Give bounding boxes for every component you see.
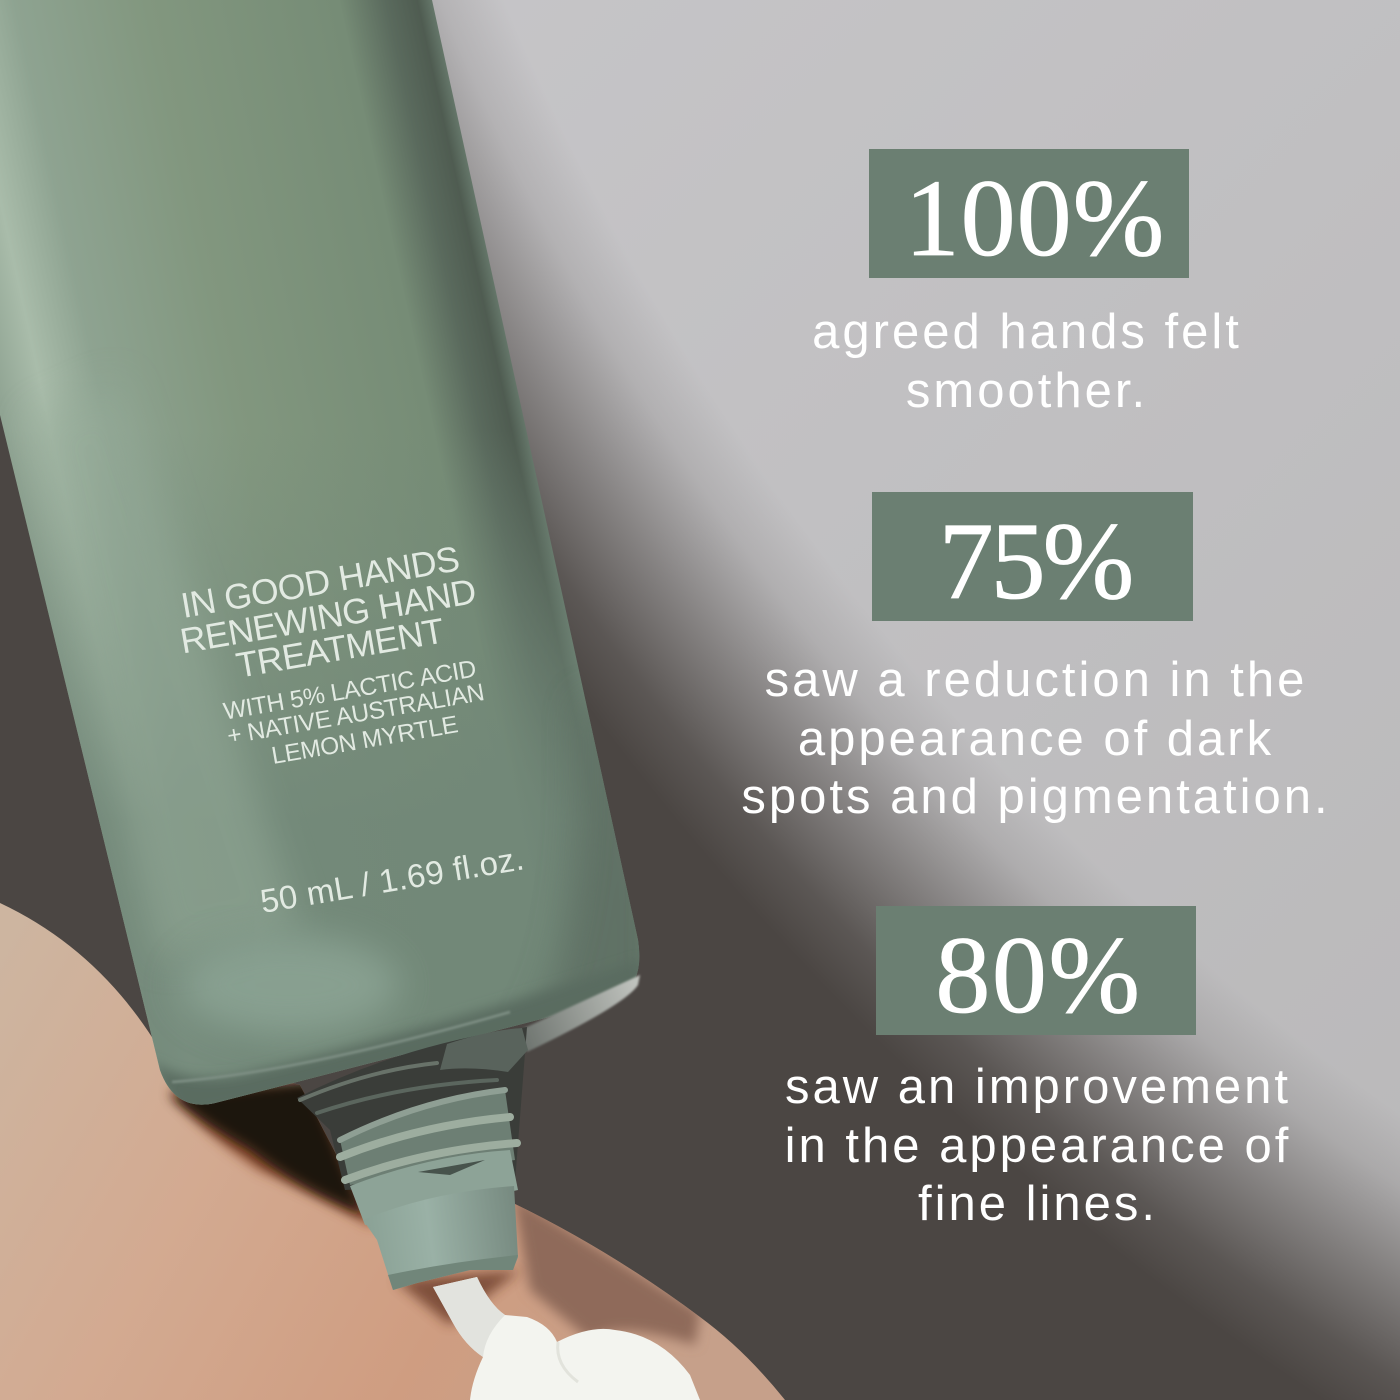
stat text: smoother: agreed hands felt [812, 305, 1242, 359]
stat badge: 75%: 75% [939, 500, 1131, 621]
stat text: smoother: smoother. [906, 364, 1148, 418]
pale tube rim [520, 975, 640, 1052]
threaded neck and nozzle [297, 1027, 528, 1290]
tube body [0, 0, 670, 1120]
stat text: fine lines: saw an improvement [785, 1060, 1291, 1114]
tube label: product name: LEMON MYRTLE [270, 711, 460, 770]
stat badge: 80% [876, 906, 1196, 1035]
tube label: product name: 50 mL / 1.69 fl.oz. [257, 839, 527, 920]
stat text: smoother [812, 305, 1242, 418]
stat text: fine lines [785, 1060, 1291, 1231]
tube label: product name: TREATMENT [233, 611, 447, 686]
stat text: dark spots: appearance of dark [798, 712, 1274, 766]
tube label: product name: + NATIVE AUSTRALIAN [225, 679, 486, 750]
stat text: dark spots: saw a reduction in the [765, 653, 1307, 707]
skin [0, 890, 800, 1400]
tube label: product name [177, 539, 527, 920]
stat text: fine lines: fine lines. [918, 1177, 1158, 1231]
stat badge: 100%: 100% [905, 157, 1165, 278]
tube label: product name: RENEWING HAND [177, 571, 479, 661]
stat text: fine lines: in the appearance of [785, 1118, 1291, 1172]
cream [433, 1277, 700, 1400]
stat text: dark spots: spots and pigmentation. [741, 770, 1331, 824]
tube label: product name: WITH 5% LACTIC ACID [221, 656, 478, 726]
tube label: product name: IN GOOD HANDS [178, 539, 462, 626]
stat badge: 80%: 80% [935, 914, 1142, 1035]
stat badge: 75% [872, 492, 1193, 621]
stat text: dark spots [741, 653, 1331, 824]
